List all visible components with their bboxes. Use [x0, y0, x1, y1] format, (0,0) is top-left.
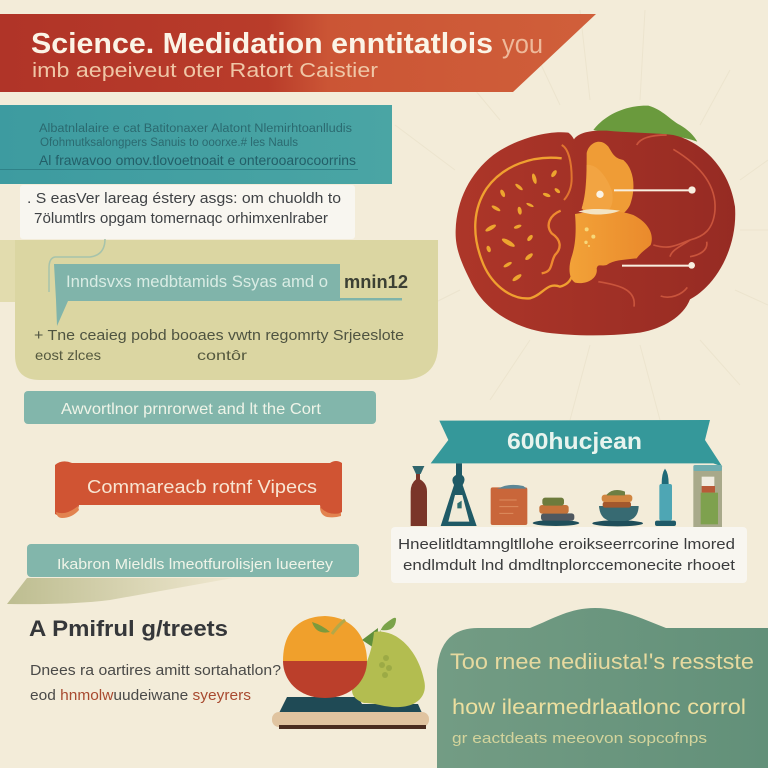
title text: Science. Medidation enntitatlois: [31, 28, 493, 60]
panel: supplies shelf: [411, 420, 722, 530]
right veins: [598, 135, 715, 307]
section line 1: Dnees ra oartires amitt sortahatlon?: [30, 662, 281, 679]
teal label: [54, 264, 340, 326]
icon: tomato cross-section: [456, 106, 735, 335]
white note: [20, 185, 355, 239]
olive body line 1: + Tne ceaieg pobd booaes vwtn regomrty Srjeeslote: [34, 327, 404, 344]
shelf note line 1: Hneelitldtamngltllohe eroikseerrcorine lmored: [398, 536, 735, 553]
subtitle: imb aepeiveut oter Ratort Caistier: [32, 60, 378, 82]
olive body line 2: eost zlces: [35, 347, 101, 363]
icon: flask: [441, 463, 477, 526]
heading: ribbon text: 600hucjean: [507, 428, 642, 454]
upper orange lobe: [582, 142, 633, 223]
note line 2: 7ölumtlrs opgam tomernaqc orhimxenlraber: [34, 210, 328, 227]
centre highlight: [578, 209, 620, 215]
tomato body: [456, 131, 735, 335]
teal ribbon heading: [431, 420, 722, 467]
olive wedge: [7, 578, 233, 604]
tan book: [272, 712, 429, 727]
title suffix: you: [502, 29, 543, 59]
dark book: [279, 697, 422, 713]
panel: olive backdrop: [0, 239, 438, 380]
title banner: [0, 14, 596, 92]
outer seed ring: [475, 158, 572, 298]
teal bar: methods: [27, 544, 359, 577]
panel: green summary: [437, 608, 768, 768]
summary line 3: gr eactdeats meeovon sopcofnps: [452, 730, 707, 747]
callout line upper: [596, 186, 696, 198]
label text: Inndsvxs medbtamids Ssyas amd o: [66, 272, 328, 291]
shelf note line 2: endlmdult lnd dmdltnplorccemonecite rhooet: [403, 557, 736, 574]
icon: test vial: [655, 469, 676, 526]
bar text: Ikabron Mieldls lmeotfurolisjen lueertey: [57, 556, 334, 573]
section line 2: eod hnmolwuudeiwane syeyrers: [30, 688, 251, 704]
intro line 2: Ofohmutksalongpers Sanuis to ooorxe.# les Nauls: [40, 137, 298, 149]
leaf: [593, 106, 697, 142]
icon: fruit on books: [272, 616, 429, 729]
apple: [283, 616, 367, 698]
icon: bowl stack: [592, 490, 643, 526]
note line 1: . S easVer lareag éstery asgs: om chuoldh to: [27, 190, 341, 207]
pear: [352, 618, 425, 707]
ribbon text: Commareacb rotnf Vipecs: [87, 477, 317, 497]
intro line 1: Albatnlalaire e cat Batitonaxer Alatont Nlemirhtoanlludis: [39, 123, 352, 135]
summary line 2: how ilearmedrlaatlonc corrol: [452, 696, 746, 719]
lower orange lobe: [569, 211, 652, 283]
label number: mnin12: [344, 272, 408, 292]
icon: dark bottle: [411, 466, 427, 526]
summary line 1: Too rnee nediiusta!'s resstste: [450, 649, 754, 674]
icon: supplement jar: [693, 465, 722, 530]
icon: plated stack: [533, 498, 579, 526]
section: fruitful text: [29, 616, 281, 704]
olive body line 2 right: contôr: [197, 347, 247, 363]
white shelf note: [391, 527, 747, 583]
callout line lower: [622, 262, 695, 269]
seeds: [484, 169, 561, 282]
section heading: A Pmifrul g/treets: [29, 616, 228, 641]
red ribbon: [55, 461, 342, 518]
teal bar: awareness: [24, 391, 376, 424]
icon: book: [491, 485, 527, 525]
bar text: Awvortlnor prnrorwet and lt the Cort: [61, 401, 322, 418]
panel: teal intro: [0, 105, 392, 184]
intro line 3: Al frawavoo omov.tlovoetnoait e onterooarocoorrins: [39, 153, 356, 168]
